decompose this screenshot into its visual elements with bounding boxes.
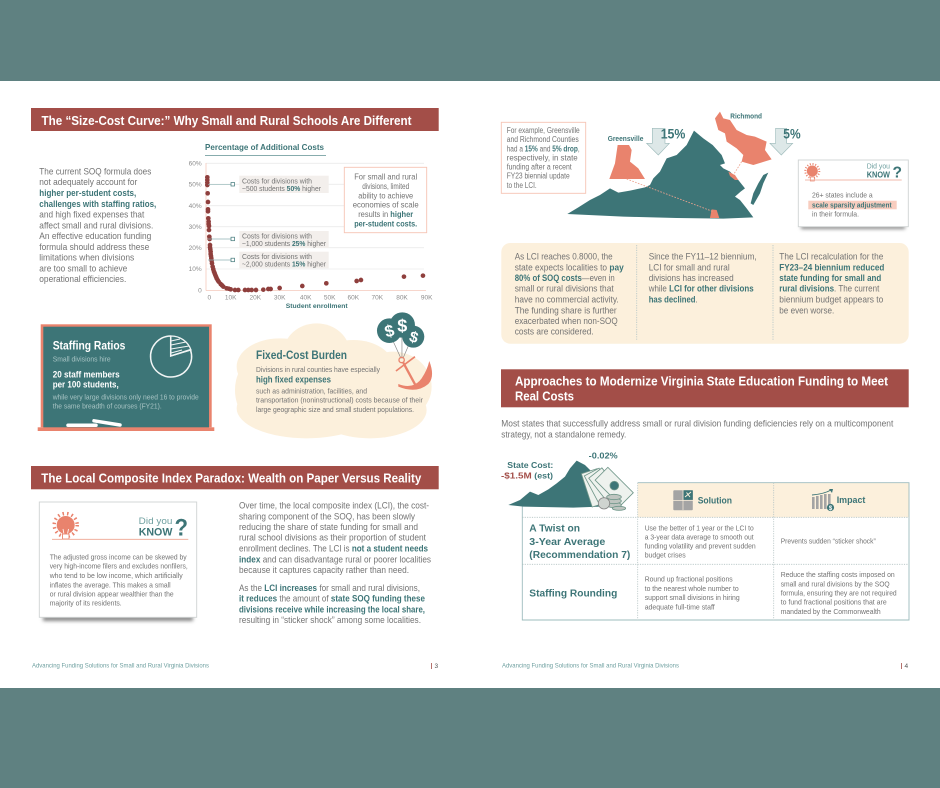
- panel: did you know card: inflates the average. This makes a small: [50, 580, 171, 589]
- x axis labels: 0: [207, 294, 211, 302]
- y axis labels: 10%: [189, 266, 202, 273]
- panel: small did you know card: scale sparsity adjustment: [812, 200, 892, 209]
- icon: money balloons and anchor: $: [407, 328, 420, 347]
- panel: small did you know card: 26+ states include a: [812, 190, 873, 199]
- text block: LCI explanation: sharing component of the SOQ, has been slowly: [239, 511, 415, 522]
- text block: LCI explanation: because it captures capacity rather than need.: [239, 565, 409, 576]
- heading: size-cost curve: [31, 108, 439, 131]
- panel: did you know card: very high-income filers and excludes nonfilers,: [50, 562, 188, 571]
- callout: economies of scale: per-student costs.: [354, 218, 417, 228]
- chart title: Percentage of Additional Costs: [205, 142, 324, 152]
- callout: 500 students: [208, 176, 329, 193]
- row: staffing rounding: [529, 570, 897, 616]
- footer: page 4: 4: [904, 663, 908, 670]
- callout: Greensville and Richmond example: funding after a recent: [507, 163, 572, 172]
- column 3: rural divisions. The current: [779, 284, 880, 295]
- row: staffing rounding: adequate full-time staff: [645, 602, 716, 611]
- callout: economies of scale: ability to achieve: [358, 190, 413, 200]
- column 3: FY23–24 biennium reduced: [779, 262, 884, 273]
- panel: did you know card: The adjusted gross income can be skewed by: [50, 552, 187, 561]
- row: three-year average: [529, 523, 876, 561]
- column 3: state funding for small and: [779, 273, 881, 284]
- row: staffing rounding: Round up fractional positions: [645, 575, 733, 584]
- panel: staffing ratios chalkboard: 20 staff members: [53, 369, 120, 380]
- callout: Greensville and Richmond example: and Richmond Counties: [507, 135, 579, 144]
- map: Virginia with Greensville and Richmond: 5%: [783, 125, 801, 141]
- icon: chalk pie chart: [151, 336, 192, 377]
- x axis labels: 10K: [225, 294, 237, 302]
- column 1: have no commercial activity.: [515, 295, 619, 306]
- table: solution and impact: Impact: [837, 495, 865, 505]
- column 2: LCI for small and rural: [649, 262, 730, 273]
- column 1: 80% of SOQ costs—even in: [515, 273, 615, 284]
- x axis labels: [207, 294, 433, 310]
- panel: small did you know card: [798, 160, 908, 229]
- text block: LCI explanation: As the LCI increases for small and rural divisions,: [239, 583, 420, 594]
- icon: money balloons and anchor: [377, 312, 432, 390]
- panel: small did you know card: Did you: [867, 163, 890, 170]
- row: three-year average: a 3-year data average to smooth out: [645, 532, 755, 541]
- callout: Greensville and Richmond example: For example, Greensville: [507, 126, 580, 135]
- text block: LCI explanation: [239, 501, 431, 626]
- callout: 500 students: ~500 students 50% higher: [242, 184, 321, 193]
- panel: did you know card: Did you: [139, 516, 172, 527]
- panel: staffing ratios chalkboard: Staffing Ratios: [53, 340, 125, 352]
- x axis labels: 30K: [274, 294, 286, 302]
- text block: LCI explanation: Over time, the local composite index (LCI), the cost-: [239, 501, 429, 512]
- callout: 500 students: Costs for divisions with: [242, 176, 312, 186]
- panel: fixed-cost burden cloud: Fixed-Cost Burden: [256, 350, 347, 362]
- callout: 2,000 students: [208, 252, 329, 268]
- text block: SOQ formula: challenges with staffing ratios,: [39, 199, 156, 210]
- text block: SOQ formula: are too small to achieve: [39, 263, 127, 274]
- column 1: state expects localities to pay: [515, 262, 624, 273]
- callout: economies of scale: [344, 167, 427, 233]
- panel: LCI facts three columns: [501, 243, 909, 344]
- heading: size-cost curve: The “Size-Cost Curve:” Why Small and Rural Schools Are Different: [42, 114, 412, 128]
- panel: did you know card: ?: [174, 515, 188, 542]
- icon: small light bulb: [805, 164, 819, 181]
- panel: fixed-cost burden cloud: such as administration, facilities, and: [256, 386, 367, 395]
- callout: 1,000 students: ~1,000 students 25% higher: [242, 239, 326, 248]
- text block: SOQ formula: [39, 166, 156, 285]
- heading: approaches to modernize: Real Costs: [515, 389, 574, 404]
- text block: LCI explanation: enrollment declines. The LCI is not a student needs: [239, 544, 428, 555]
- row: three-year average: Prevents sudden “sticker shock”: [781, 537, 876, 546]
- icon: money balloons and anchor: $: [382, 321, 397, 342]
- panel: small did you know card: KNOW: [867, 170, 890, 179]
- graphic: state cost, Virginia with money: -0.02%: [589, 451, 618, 461]
- row: three-year average: 3-Year Average: [529, 536, 605, 548]
- map: Virginia with Greensville and Richmond: 15%: [661, 125, 686, 141]
- column 2: [648, 252, 757, 306]
- icon: fanned cash and coins: [581, 467, 633, 510]
- row: three-year average: Use the better of 1 year or the LCI to: [645, 523, 754, 532]
- graphic: state cost, Virginia with money: State Cost:: [507, 460, 553, 470]
- x axis labels: 20K: [250, 294, 262, 302]
- column 2: while LCI for other divisions: [648, 284, 754, 295]
- footer: page 4: Advancing Funding Solutions for Small and Rural Virginia Divisions: [502, 662, 680, 669]
- icon: money balloons and anchor: $: [397, 315, 407, 335]
- map: Virginia with Greensville and Richmond: [567, 112, 801, 219]
- panel: staffing ratios chalkboard: while very large divisions only need 16 to provide: [52, 392, 199, 401]
- row: staffing rounding: to the nearest whole number to: [645, 584, 739, 593]
- x axis labels: 40K: [300, 294, 312, 302]
- text block: SOQ formula: not adequately account for: [39, 177, 137, 188]
- footer: page 4: [502, 662, 908, 670]
- column 1: [515, 252, 624, 338]
- row: staffing rounding: Reduce the staffing costs imposed on: [781, 570, 895, 579]
- heading: local composite index paradox: The Local Composite Index Paradox: Wealth on Paper Versus Reality: [41, 472, 421, 486]
- text block: SOQ formula: operational efficiencies.: [39, 274, 126, 285]
- panel: fixed-cost burden cloud: Divisions in rural counties have especially: [256, 365, 380, 374]
- panel: did you know card: or rural division appear wealthier than the: [50, 589, 174, 598]
- heading: approaches to modernize: [501, 369, 909, 407]
- column 1: small or rural divisions that: [515, 284, 614, 295]
- text block: LCI explanation: resulting in “sticker shock” among some localities.: [239, 615, 421, 626]
- x axis labels: 60K: [348, 294, 360, 302]
- text block: SOQ formula: limitations when divisions: [39, 253, 135, 264]
- icon: rising bars with dollar: $: [829, 506, 833, 512]
- text block: LCI explanation: divisions receive while increasing the local share,: [239, 604, 425, 615]
- y axis labels: 40%: [189, 203, 202, 210]
- row: three-year average: A Twist on: [529, 523, 580, 535]
- graphic: state cost, Virginia with money: [501, 451, 633, 510]
- text block: LCI explanation: reducing the share of state funding for small and: [239, 522, 418, 533]
- column 2: Since the FY11–12 biennium,: [649, 252, 757, 263]
- arrow: 15 percent drop: [647, 128, 669, 155]
- panel: staffing ratios chalkboard: per 100 students,: [53, 379, 119, 390]
- scatter points: [205, 175, 425, 292]
- footer: page 3: 3: [434, 663, 438, 670]
- panel: did you know card: [39, 502, 197, 621]
- row: three-year average: budget crises: [645, 551, 686, 560]
- panel: did you know card: majority of its residents.: [50, 598, 122, 607]
- callout: Greensville and Richmond example: to the LCI.: [507, 181, 537, 190]
- text block: LCI explanation: it reduces the amount of state SOQ funding these: [239, 594, 425, 605]
- column 3: [779, 252, 884, 316]
- x axis labels: Student enrollment: [286, 303, 348, 310]
- Richmond county enlarged: [715, 112, 772, 165]
- column 2: divisions has increased: [649, 273, 734, 284]
- graphic: state cost, Virginia with money: -$1.5M: [501, 471, 532, 481]
- callout: economies of scale: economies of scale: [353, 200, 419, 210]
- row: staffing rounding: mandated by the Commonwealth: [781, 607, 881, 616]
- column 1: exacerbated when non-SOQ: [515, 316, 618, 327]
- row: staffing rounding: support small divisions in hiring: [645, 593, 740, 602]
- text block: LCI explanation: rural school divisions as their proportion of student: [239, 533, 426, 544]
- row: three-year average: (Recommendation 7): [529, 549, 630, 561]
- column 3: be even worse.: [779, 305, 834, 316]
- y axis labels: [189, 160, 202, 294]
- callout: Greensville and Richmond example: [501, 122, 586, 193]
- row: staffing rounding: Staffing Rounding: [529, 588, 617, 600]
- x axis labels: 90K: [421, 294, 433, 302]
- text block: SOQ formula: affect small and rural divisions.: [39, 220, 153, 231]
- text block: LCI explanation: index and can disadvantage rural or poorer localities: [239, 554, 431, 565]
- text block: SOQ formula: The current SOQ formula does: [39, 166, 152, 178]
- callout: economies of scale: divisions, limited: [362, 181, 409, 191]
- callout: 1,000 students: Costs for divisions with: [242, 232, 312, 240]
- column 1: The funding share is further: [515, 305, 617, 316]
- panel: did you know card: KNOW: [139, 526, 173, 538]
- text block: SOQ formula: and high fixed expenses that: [39, 210, 145, 220]
- callout: economies of scale: For small and rural: [354, 172, 417, 182]
- panel: fixed-cost burden cloud: transportation (noninstructional) costs because of their: [256, 396, 423, 405]
- panel: did you know card: who tend to be low income, which artificially: [49, 571, 183, 580]
- panel: staffing ratios chalkboard: the same breadth of courses (FY21).: [53, 402, 162, 411]
- map: Virginia with Greensville and Richmond: Greensville: [608, 136, 643, 143]
- table: solution and impact: Solution: [698, 495, 732, 505]
- y axis labels: 20%: [189, 245, 202, 252]
- panel: fixed-cost burden cloud: high fixed expenses: [256, 375, 331, 385]
- footer: page 3: [32, 662, 438, 670]
- x axis labels: 50K: [324, 294, 336, 302]
- small Virginia shape: [508, 461, 605, 508]
- icon: puzzle: [673, 490, 693, 510]
- text block: SOQ formula: An effective education funding: [39, 231, 151, 242]
- map: Virginia with Greensville and Richmond: Richmond: [730, 113, 762, 120]
- row: three-year average: funding volatility and prevent sudden: [645, 542, 756, 551]
- Greensville county enlarged: [609, 145, 645, 179]
- callout: economies of scale: results in higher: [358, 209, 414, 219]
- callout: Greensville and Richmond example: FY23 biennial update: [507, 172, 570, 181]
- row: staffing rounding: small and rural divisions by the SOQ: [781, 579, 890, 588]
- panel: small did you know card: in their formula.: [812, 209, 859, 218]
- Virginia outline: [567, 131, 768, 219]
- heading: approaches to modernize: Approaches to Modernize Virginia State Education Funding to Meet: [515, 374, 889, 389]
- text block: multicomponent strategy: Most states that successfully address small or rural division funding deficiencies rely on a multicomponent: [501, 419, 894, 430]
- column 2: has declined.: [649, 295, 698, 306]
- y axis labels: 50%: [189, 182, 202, 188]
- panel: staffing ratios chalkboard: [38, 324, 214, 431]
- arrow: 5 percent drop: [770, 128, 793, 155]
- callout: Greensville and Richmond example: had a 15% and 5% drop,: [507, 144, 580, 153]
- column 1: costs are considered.: [515, 327, 594, 338]
- y axis labels: 30%: [189, 224, 202, 231]
- chart: percentage of additional costs: [189, 142, 433, 310]
- heading: local composite index paradox: [31, 466, 439, 489]
- column 3: biennium budget appears to: [779, 295, 883, 306]
- callout: 2,000 students: Costs for divisions with: [242, 252, 312, 261]
- column 3: The LCI recalculation for the: [779, 252, 883, 263]
- text block: SOQ formula: formula should address these: [39, 242, 149, 253]
- panel: staffing ratios chalkboard: Small divisions hire: [53, 355, 111, 364]
- white report spread: [0, 81, 940, 688]
- row: staffing rounding: formula, ensuring they are not required: [781, 588, 897, 597]
- column 1: As LCI reaches 0.8000, the: [515, 252, 613, 263]
- table: solution and impact: [522, 483, 909, 620]
- callout: Greensville and Richmond example: respectively, in state: [507, 153, 578, 162]
- graphic: state cost, Virginia with money: (est): [534, 471, 553, 481]
- callout: 2,000 students: ~2,000 students 15% higher: [242, 260, 326, 268]
- text block: SOQ formula: higher per-student costs,: [39, 188, 136, 199]
- icon: light bulb: [54, 514, 77, 539]
- footer: page 3: Advancing Funding Solutions for Small and Rural Virginia Divisions: [32, 662, 210, 669]
- icon: rising bars with dollar: [812, 489, 834, 512]
- row: staffing rounding: to fund fractional positions that are: [781, 598, 887, 607]
- callout: 1,000 students: [208, 231, 329, 248]
- text block: multicomponent strategy: [501, 419, 894, 440]
- panel: fixed-cost burden cloud: [235, 312, 432, 438]
- x axis labels: 80K: [396, 294, 408, 302]
- x axis labels: 70K: [372, 294, 384, 302]
- panel: fixed-cost burden cloud: large geographic size and small student populations.: [256, 405, 414, 414]
- text block: multicomponent strategy: strategy, not a standalone remedy.: [501, 430, 626, 440]
- panel: small did you know card: ?: [892, 164, 902, 181]
- y axis labels: 60%: [189, 160, 202, 168]
- y axis labels: 0: [198, 288, 202, 294]
